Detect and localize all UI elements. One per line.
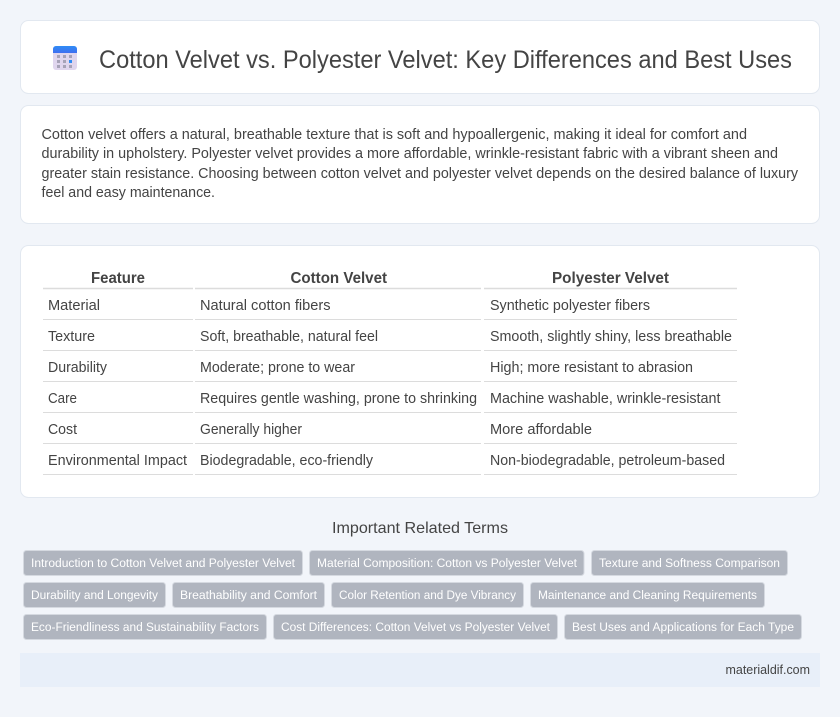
related term tags [24,550,802,640]
panel: comparison table [20,246,820,498]
related term tags: Best Uses and Applications for Each Type [572,620,794,634]
row: material [48,298,650,314]
related term tags: Eco-Friendliness and Sustainability Factors [31,620,259,634]
row: environmental impact: Non-biodegradable, petroleum-based [490,453,725,469]
panel: intro paragraph [20,106,820,224]
related term tags: Maintenance and Cleaning Requirements [538,588,757,602]
panel: intro paragraph: durability in upholstery. Polyester velvet provides a more affordable, wrinkle-resistant fabric with a vibrant sheen and [42,146,778,162]
table header [91,270,670,287]
row: material: Synthetic polyester fibers [490,298,650,314]
row: durability: High; more resistant to abrasion [490,360,693,376]
heading: related terms: Important Related Terms [332,520,508,537]
title: Cotton Velvet vs. Polyester Velvet: Key Differences and Best Uses [99,46,792,74]
row: cost: Cost [48,422,77,438]
row: environmental impact: Biodegradable, eco-friendly [200,453,374,469]
row: material: Natural cotton fibers [200,298,330,314]
related term tags: Durability and Longevity [31,588,159,602]
related term tags: Breathability and Comfort [180,588,318,602]
row: durability: Moderate; prone to wear [200,360,355,376]
table header: Polyester Velvet [552,270,670,287]
row: durability: Durability [48,360,108,376]
footer bar: materialdif.com [726,662,810,677]
row: material: Material [48,298,100,314]
related term tags: Texture and Softness Comparison [599,556,780,570]
related term tags: Cost Differences: Cotton Velvet vs Polyester Velvet [281,620,551,634]
row: texture: Soft, breathable, natural feel [200,329,378,345]
panel: intro paragraph: greater stain resistance. Choosing between cotton velvet and polyester velvet depends on the desired balance of luxury [42,166,799,182]
row: texture: Smooth, slightly shiny, less breathable [490,329,732,345]
panel: title header [20,20,820,94]
row: care: Care [48,391,77,407]
row: texture: Texture [48,329,95,345]
row: environmental impact [48,453,725,469]
row: care: Requires gentle washing, prone to shrinking [200,391,477,407]
row: texture [48,329,732,345]
row: cost: More affordable [490,422,592,438]
footer bar [20,653,820,687]
table header: Feature [91,270,145,287]
table header: Cotton Velvet [290,270,388,287]
related term tags: Introduction to Cotton Velvet and Polyester Velvet [31,556,296,570]
panel: intro paragraph: feel and easy maintenance. [42,185,215,201]
panel: intro paragraph: Cotton velvet offers a natural, breathable texture that is soft and hypoallergenic, making it ideal for comfort and [42,127,747,143]
row: durability [48,360,693,376]
row: cost: Generally higher [200,422,302,438]
icon: calendar [53,46,77,70]
related term tags: Material Composition: Cotton vs Polyester Velvet [317,556,578,570]
row: environmental impact: Environmental Impact [48,453,187,469]
row: care [48,391,720,407]
related term tags: Color Retention and Dye Vibrancy [339,588,517,602]
row: cost [48,422,592,438]
row: care: Machine washable, wrinkle-resistant [490,391,720,407]
